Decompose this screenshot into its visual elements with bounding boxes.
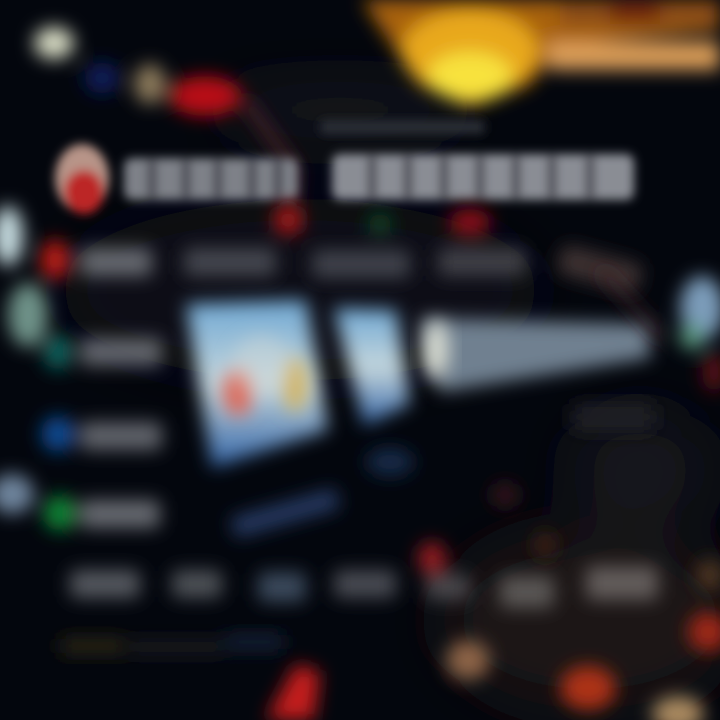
top lights — [34, 27, 295, 225]
background glow — [60, 88, 720, 710]
screen: left — [186, 300, 328, 468]
footer note — [60, 634, 284, 654]
column header row — [184, 205, 644, 294]
right edge lights — [600, 270, 720, 392]
row labels with icons — [0, 206, 162, 531]
chandelier glow — [362, 0, 720, 108]
bottom labels row — [70, 542, 658, 608]
bottom lights — [266, 559, 720, 720]
screen: right band — [420, 318, 650, 392]
screen: left details — [223, 335, 307, 416]
lower chart smudges — [230, 404, 654, 559]
screen: right highlight — [423, 320, 449, 380]
screen: middle — [334, 308, 410, 426]
title — [55, 120, 634, 214]
main screen panel — [186, 300, 650, 468]
